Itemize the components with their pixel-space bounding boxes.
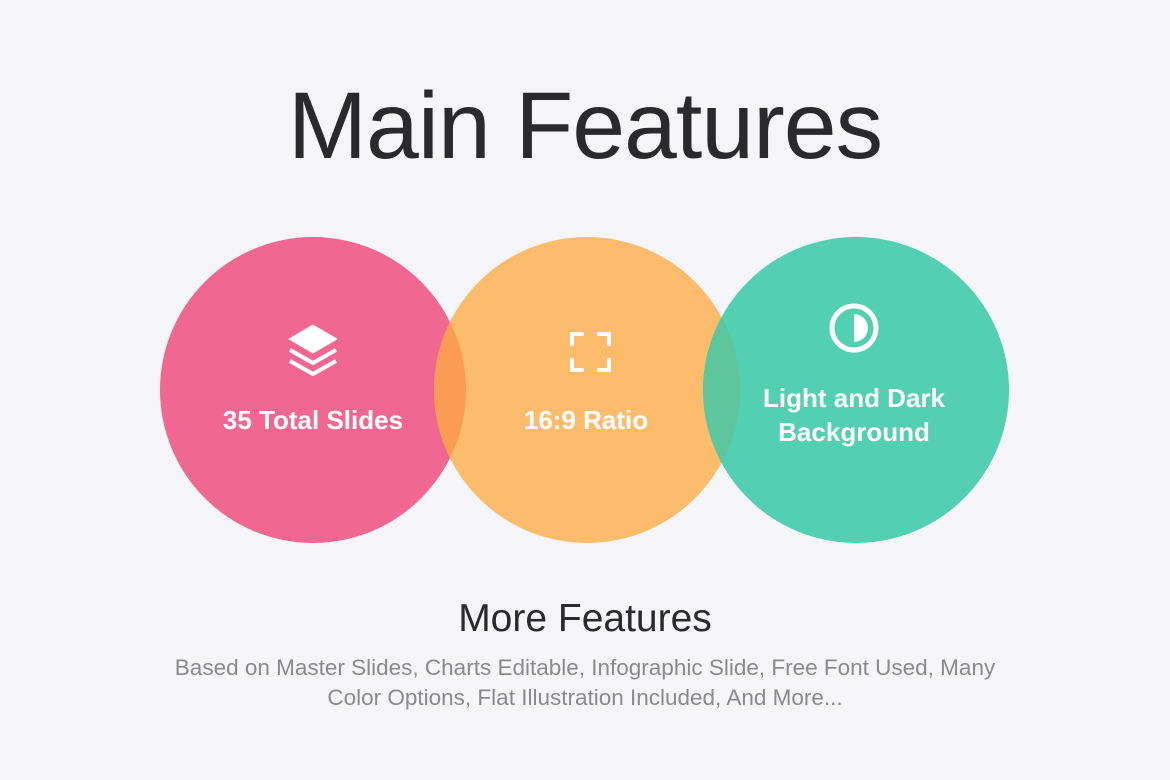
label: teal: Background bbox=[778, 417, 930, 447]
label: orange: 16:9 Ratio bbox=[524, 405, 648, 435]
description: Based on Master Slides, Charts Editable, Infographic Slide, Free Font Used, Many bbox=[175, 655, 995, 680]
label: pink: 35 Total Slides bbox=[223, 405, 403, 435]
circle: orange bbox=[434, 237, 740, 543]
description: Color Options, Flat Illustration Included, And More... bbox=[327, 685, 843, 710]
circle: pink bbox=[160, 237, 466, 543]
title: Main Features bbox=[288, 73, 882, 179]
subheading: More Features bbox=[458, 597, 712, 640]
icon: layers bbox=[289, 325, 337, 374]
icon: fullscreen bbox=[572, 334, 609, 370]
venn diagram bbox=[160, 237, 1009, 543]
description bbox=[175, 655, 996, 710]
icon: contrast bbox=[832, 306, 876, 350]
circle: teal bbox=[703, 237, 1009, 543]
label: teal: Light and Dark bbox=[763, 383, 946, 413]
